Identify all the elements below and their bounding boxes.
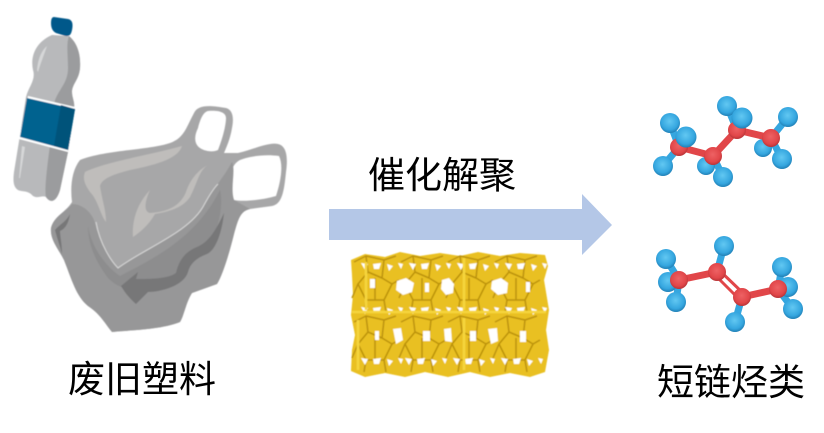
label: short-chain hydrocarbons: 短链烃类 bbox=[657, 362, 805, 403]
label: waste plastics: 废旧塑料 bbox=[68, 359, 216, 400]
icon: plastic bag bbox=[51, 106, 287, 332]
heading: catalytic depolymerization: 催化解聚 bbox=[368, 155, 516, 196]
icon: zeolite framework bbox=[351, 252, 549, 377]
icon: plastic bottle bbox=[13, 17, 80, 201]
icon: alkane molecule bbox=[653, 96, 798, 187]
icon: alkene molecule bbox=[656, 236, 803, 332]
arrow: catalytic depolymerization bbox=[329, 194, 612, 255]
